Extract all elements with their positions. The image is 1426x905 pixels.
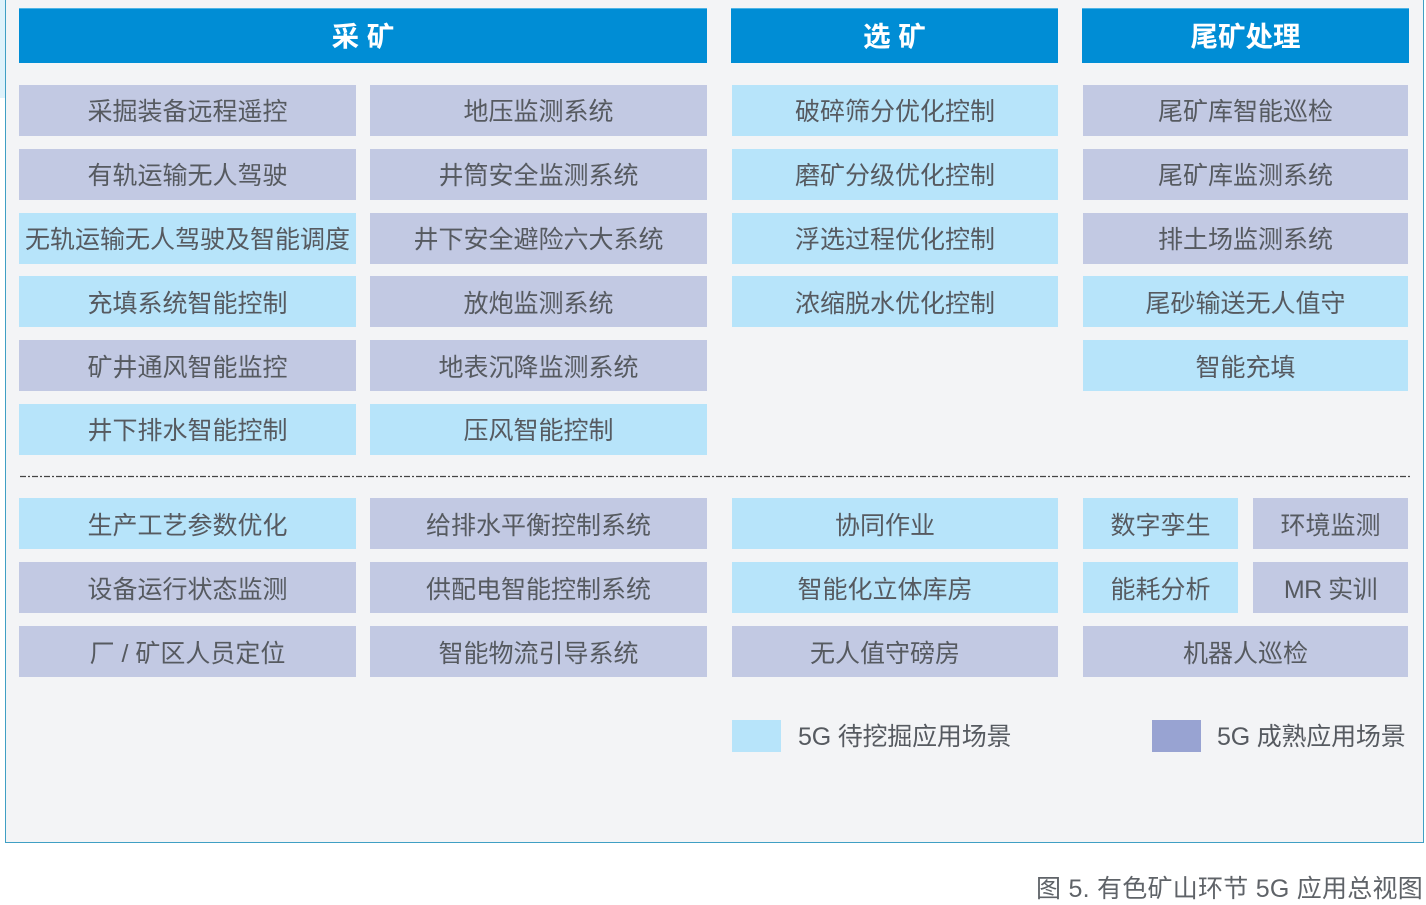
cell: 给排水平衡控制系统: 给排水平衡控制系统 — [426, 512, 651, 540]
heading: tailings — [1082, 8, 1409, 63]
cell: 给排水平衡控制系统 — [370, 498, 707, 549]
cell: 尾矿库智能巡检: 尾矿库智能巡检 — [1158, 98, 1333, 126]
legend swatch: to be explored — [732, 720, 781, 752]
cell: 磨矿分级优化控制 — [732, 149, 1058, 200]
cell: MR 实训 — [1253, 562, 1408, 613]
cell: 浮选过程优化控制: 浮选过程优化控制 — [795, 226, 995, 254]
cell: 浮选过程优化控制 — [732, 213, 1058, 264]
cell: 地压监测系统 — [370, 85, 707, 136]
cell: 破碎筛分优化控制 — [732, 85, 1058, 136]
cell: 数字孪生 — [1083, 498, 1238, 549]
cell: 矿井通风智能监控 — [19, 340, 356, 391]
cell: 智能充填 — [1083, 340, 1408, 391]
cell: 智能物流引导系统 — [370, 626, 707, 677]
heading: mining — [19, 8, 707, 63]
legend label: mature: 5G 成熟应用场景 — [1217, 723, 1406, 751]
cell: 环境监测 — [1253, 498, 1408, 549]
cell: 地压监测系统: 地压监测系统 — [463, 98, 614, 126]
cell: 设备运行状态监测: 设备运行状态监测 — [87, 576, 288, 604]
cell: 供配电智能控制系统: 供配电智能控制系统 — [426, 576, 651, 604]
cell: 井下安全避险六大系统 — [370, 213, 707, 264]
cell: 排土场监测系统: 排土场监测系统 — [1158, 226, 1333, 254]
cell: 协同作业: 协同作业 — [835, 512, 935, 540]
cell: 井下排水智能控制: 井下排水智能控制 — [87, 417, 288, 445]
heading: tailings: 尾矿处理 — [1190, 21, 1300, 52]
cell: 放炮监测系统: 放炮监测系统 — [463, 290, 614, 318]
cell: 采掘装备远程遥控: 采掘装备远程遥控 — [87, 98, 288, 126]
cell: 浓缩脱水优化控制: 浓缩脱水优化控制 — [795, 290, 995, 318]
cell: 充填系统智能控制 — [19, 276, 356, 327]
cell: 井筒安全监测系统 — [370, 149, 707, 200]
cell: 矿井通风智能监控: 矿井通风智能监控 — [87, 354, 288, 382]
cell: 智能物流引导系统: 智能物流引导系统 — [438, 640, 638, 668]
legend label: to be explored: 5G 待挖掘应用场景 — [798, 723, 1011, 751]
cell: 破碎筛分优化控制: 破碎筛分优化控制 — [795, 98, 995, 126]
cell: 有轨运输无人驾驶: 有轨运输无人驾驶 — [87, 162, 288, 190]
cell: 排土场监测系统 — [1083, 213, 1408, 264]
cell: 协同作业 — [732, 498, 1058, 549]
cell: 地表沉降监测系统: 地表沉降监测系统 — [438, 354, 638, 382]
cell: 尾矿库监测系统 — [1083, 149, 1408, 200]
cell: 智能充填: 智能充填 — [1195, 354, 1296, 382]
heading: ore processing: 选 矿 — [863, 21, 926, 52]
cell: 放炮监测系统 — [370, 276, 707, 327]
cell: 地表沉降监测系统 — [370, 340, 707, 391]
heading: mining: 采 矿 — [332, 21, 394, 52]
cell: 尾矿库智能巡检 — [1083, 85, 1408, 136]
cell: 有轨运输无人驾驶 — [19, 149, 356, 200]
cell: 浓缩脱水优化控制 — [732, 276, 1058, 327]
cell: 尾砂输送无人值守: 尾砂输送无人值守 — [1145, 290, 1346, 318]
cell: 无人值守磅房 — [732, 626, 1058, 677]
cell: 机器人巡检: 机器人巡检 — [1183, 640, 1308, 668]
cell: 数字孪生: 数字孪生 — [1110, 512, 1210, 540]
cell: 磨矿分级优化控制: 磨矿分级优化控制 — [795, 162, 995, 190]
background tint at top left — [0, 0, 5, 98]
cell: 无人值守磅房: 无人值守磅房 — [810, 640, 960, 668]
cell: 机器人巡检 — [1083, 626, 1408, 677]
cell: 生产工艺参数优化 — [19, 498, 356, 549]
cell: 厂 / 矿区人员定位: 厂 / 矿区人员定位 — [90, 640, 285, 668]
cell: 能耗分析 — [1083, 562, 1238, 613]
cell: 环境监测: 环境监测 — [1280, 512, 1380, 540]
cell: 采掘装备远程遥控 — [19, 85, 356, 136]
cell: 井下排水智能控制 — [19, 404, 356, 455]
caption: 图 5. 有色矿山环节 5G 应用总视图 — [1036, 875, 1423, 903]
cell: 智能化立体库房: 智能化立体库房 — [797, 576, 972, 604]
cell: 设备运行状态监测 — [19, 562, 356, 613]
cell: 尾砂输送无人值守 — [1083, 276, 1408, 327]
cell: 智能化立体库房 — [732, 562, 1058, 613]
legend swatch: mature — [1152, 720, 1201, 752]
heading: ore processing — [731, 8, 1058, 63]
cell: 厂 / 矿区人员定位 — [19, 626, 356, 677]
cell: 充填系统智能控制: 充填系统智能控制 — [87, 290, 288, 318]
cell: 无轨运输无人驾驶及智能调度: 无轨运输无人驾驶及智能调度 — [25, 226, 350, 254]
cell: 压风智能控制 — [370, 404, 707, 455]
cell: 供配电智能控制系统 — [370, 562, 707, 613]
cell: 生产工艺参数优化: 生产工艺参数优化 — [87, 512, 288, 540]
cell: MR 实训: MR 实训 — [1284, 576, 1377, 604]
cell: 无轨运输无人驾驶及智能调度 — [19, 213, 356, 264]
cell: 井下安全避险六大系统: 井下安全避险六大系统 — [413, 226, 664, 254]
cell: 尾矿库监测系统: 尾矿库监测系统 — [1158, 162, 1333, 190]
cell: 压风智能控制: 压风智能控制 — [463, 417, 614, 445]
cell: 井筒安全监测系统: 井筒安全监测系统 — [438, 162, 638, 190]
cell: 能耗分析: 能耗分析 — [1110, 576, 1210, 604]
